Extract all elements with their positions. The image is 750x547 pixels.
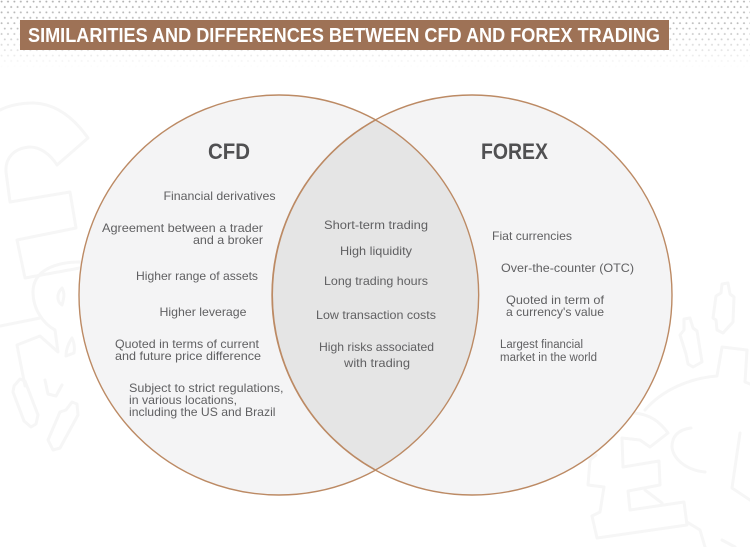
- item: quoted: Quoted in terms of current: [115, 337, 260, 351]
- item: largest market: [500, 339, 597, 364]
- item: range of assets: Higher range of assets: [136, 269, 258, 283]
- item: high risks: High risks associated: [319, 340, 434, 354]
- item: low transaction costs: Low transaction costs: [316, 308, 436, 322]
- item: short-term trading: Short-term trading: [324, 218, 428, 232]
- circle: CFD: [79, 95, 479, 495]
- circle: FOREX: [272, 95, 672, 495]
- heading: FOREX: FOREX: [481, 139, 548, 164]
- item: high risks: with trading: [343, 356, 410, 370]
- item: largest market: Largest financial: [500, 339, 583, 351]
- title banner: [20, 20, 669, 50]
- watermark: right currency symbols: [588, 283, 750, 547]
- item: quoted: a currency's value: [506, 305, 604, 319]
- item: quoted: [115, 337, 261, 363]
- item: regulations: Subject to strict regulations,: [129, 381, 284, 395]
- venn diagram: [79, 95, 672, 495]
- item: regulations: in various locations,: [129, 393, 237, 407]
- title banner: SIMILARITIES AND DIFFERENCES BETWEEN CFD AND FOREX TRADING: [28, 25, 660, 47]
- item: regulations: including the US and Brazil: [129, 405, 276, 419]
- heading: CFD: CFD: [208, 139, 250, 164]
- watermark: left currency symbols: [0, 103, 88, 450]
- item: agreement: Agreement between a trader: [102, 221, 263, 235]
- item: quoted: [506, 293, 605, 319]
- item: OTC: Over-the-counter (OTC): [501, 261, 634, 275]
- item: agreement: and a broker: [193, 233, 263, 247]
- halftone dot background: [0, 0, 750, 62]
- overlap region: [272, 120, 479, 470]
- item: regulations: [129, 381, 284, 419]
- item: leverage: Higher leverage: [160, 305, 247, 319]
- shared list: [316, 218, 436, 370]
- item: long trading hours: Long trading hours: [324, 274, 428, 288]
- FOREX list: [492, 229, 634, 364]
- CFD list: [102, 189, 284, 419]
- item: high liquidity: High liquidity: [340, 244, 412, 258]
- item: financial derivatives: Financial derivatives: [164, 189, 276, 203]
- item: quoted: and future price difference: [115, 349, 261, 363]
- item: fiat currencies: Fiat currencies: [492, 229, 572, 243]
- item: quoted: Quoted in term of: [506, 293, 605, 307]
- item: high risks: [319, 340, 434, 370]
- item: agreement: [102, 221, 263, 247]
- item: largest market: market in the world: [500, 352, 597, 364]
